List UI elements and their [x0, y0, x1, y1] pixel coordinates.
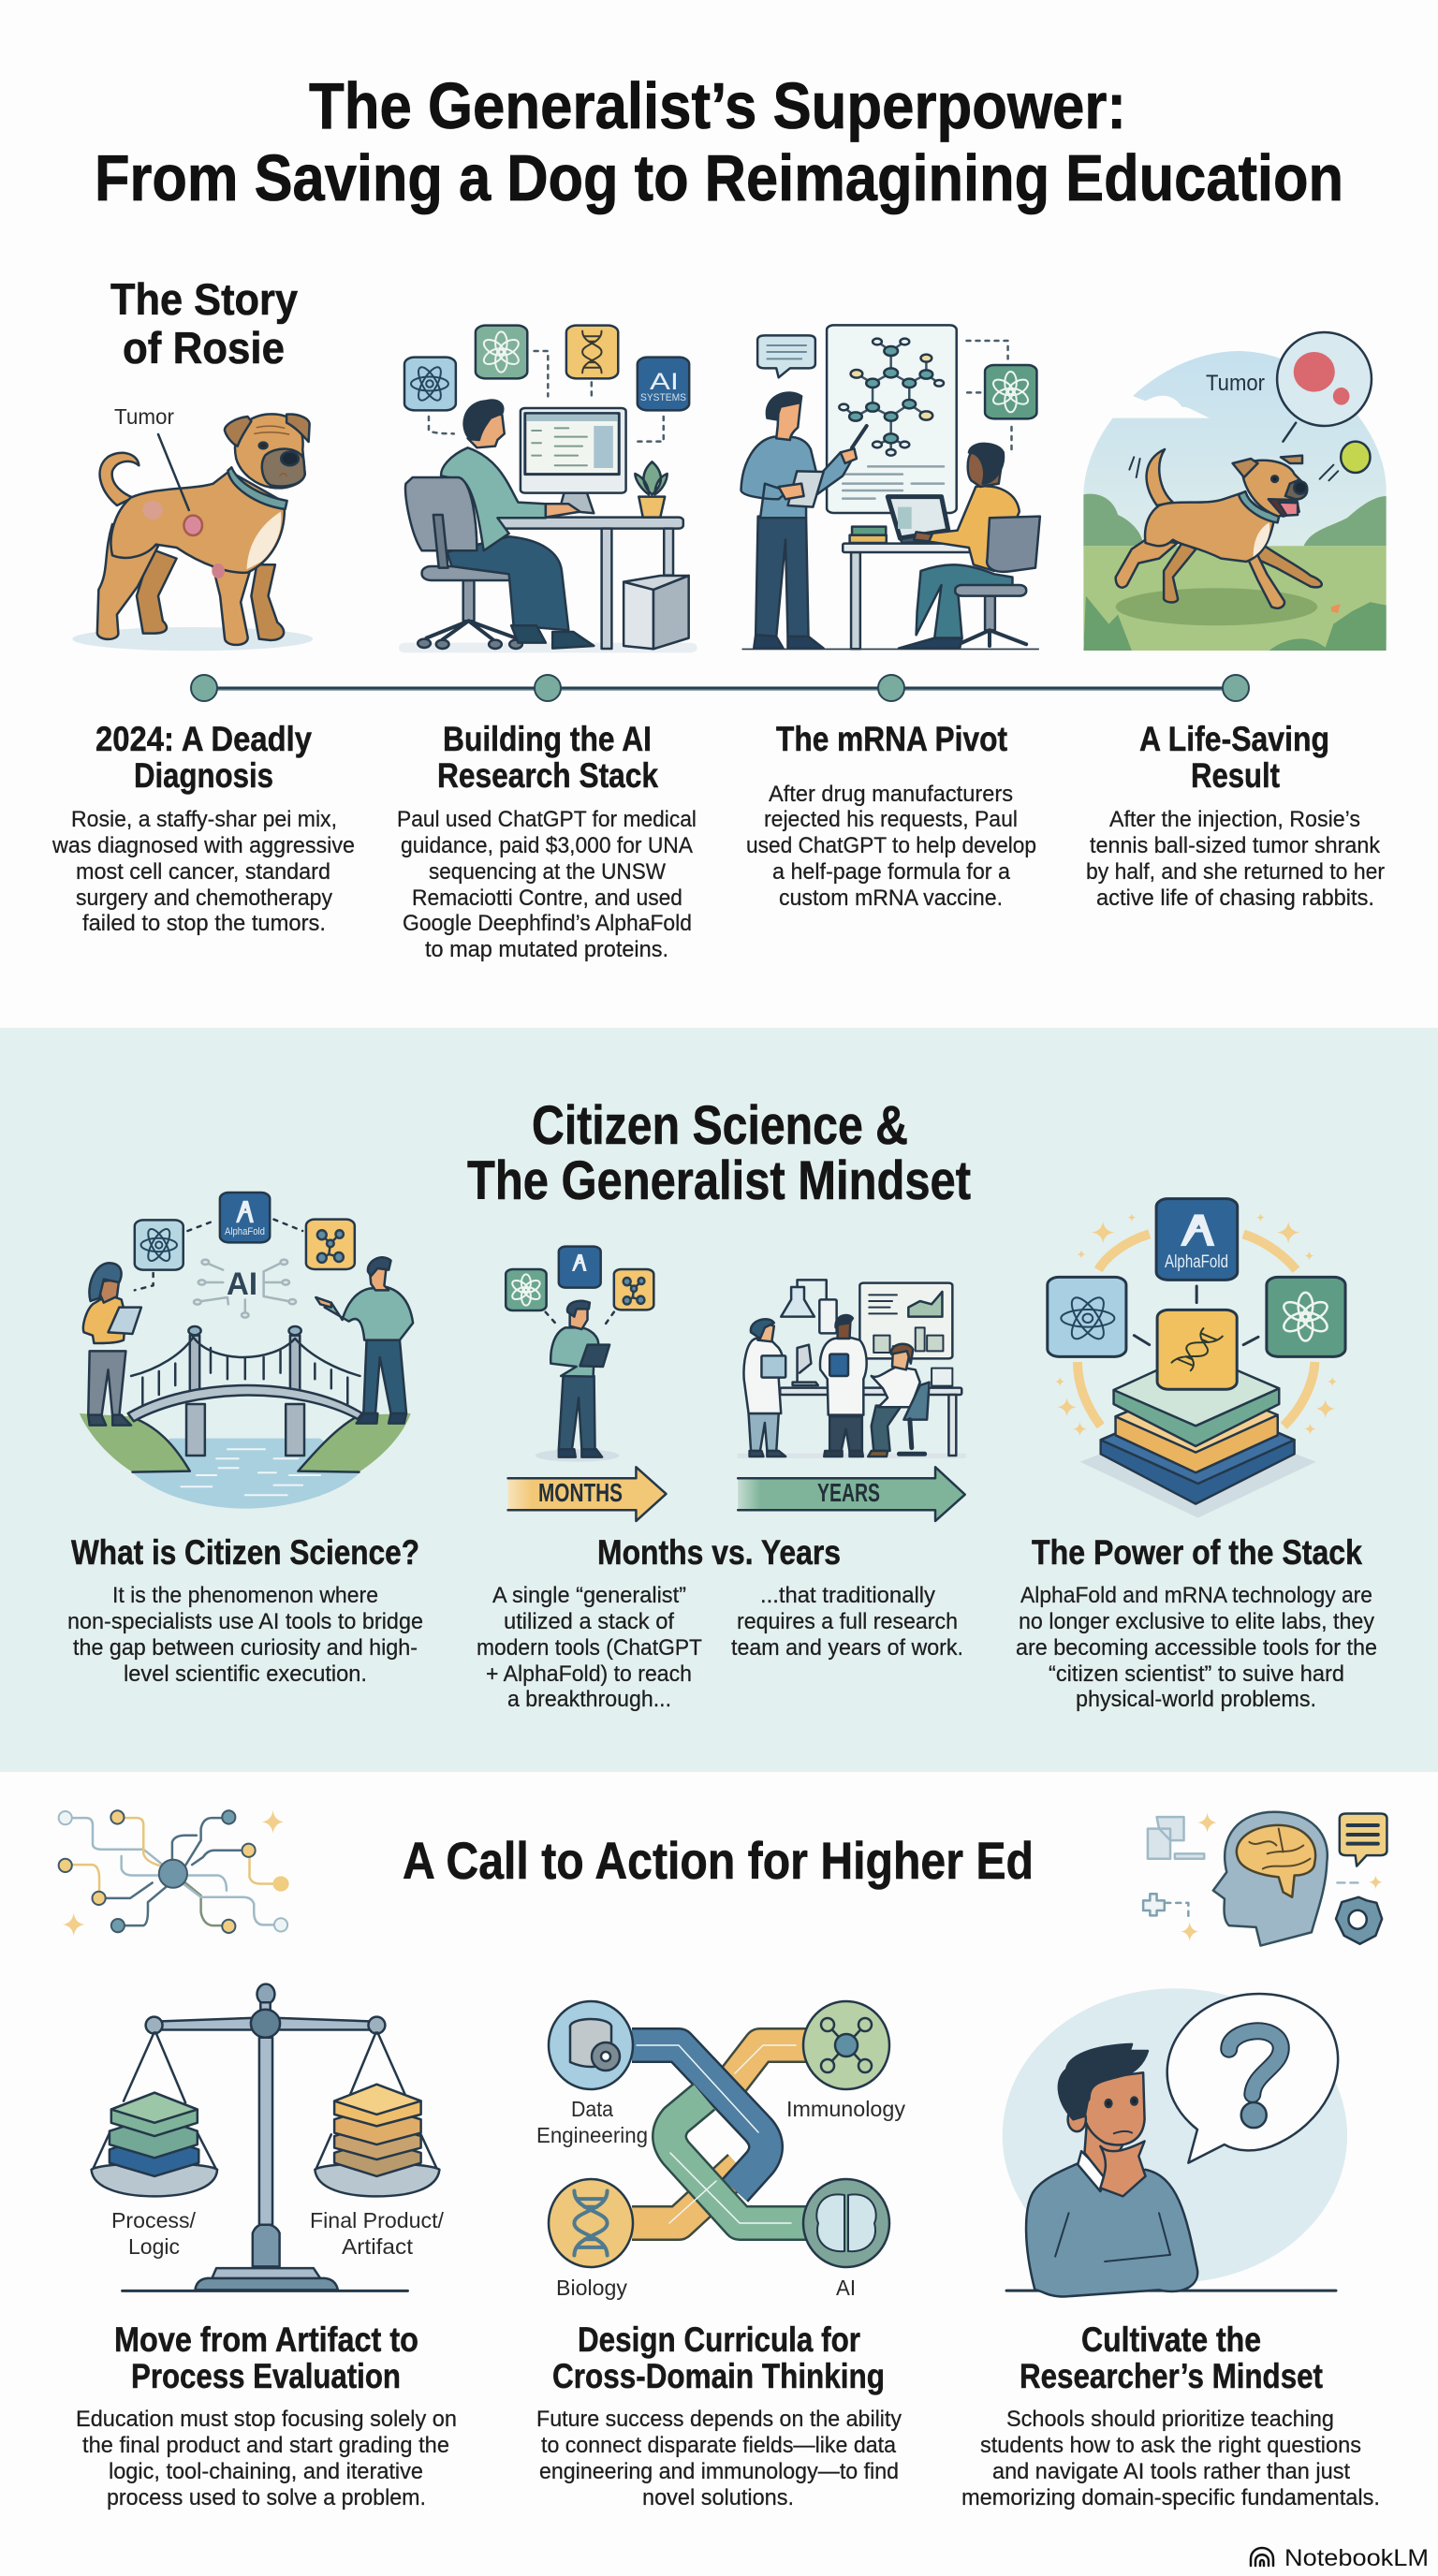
text: Months vs. Years: A single “generalist” — [492, 1583, 686, 1608]
text: Design Curricula for Cross-Domain Thinking: novel solutions. — [642, 2485, 794, 2510]
badge text: AI systems: AI — [650, 369, 679, 395]
text: Design Curricula for Cross-Domain Thinking — [536, 2320, 902, 2510]
text: Building the AI Research Stack: to map mutated proteins. — [425, 937, 668, 962]
icon: circuit network — [59, 1810, 288, 1937]
text: Design Curricula for Cross-Domain Thinking: to connect disparate fields—like data — [541, 2433, 897, 2458]
heading: Citizen Science and The Generalist Mindset: Citizen Science & — [532, 1095, 908, 1156]
illustration: the power of the stack — [1048, 1199, 1345, 1518]
panel: citizen science background — [0, 1028, 1438, 1772]
text: Months vs. Years: modern tools (ChatGPT — [477, 1635, 702, 1661]
text: Move from Artifact to Process Evaluation — [76, 2320, 457, 2510]
text: The mRNA Pivot: After drug manufacturers — [769, 782, 1013, 807]
text: Move from Artifact to Process Evaluation: process used to solve a problem. — [107, 2485, 426, 2510]
text: Move from Artifact to Process Evaluation: the final product and start grading the — [82, 2433, 449, 2458]
text: The Power of the Stack: no longer exclusive to elite labs, they — [1019, 1609, 1374, 1634]
text: Design Curricula for Cross-Domain Thinking: Cross-Domain Thinking — [552, 2357, 885, 2395]
text: Months vs. Years: + AlphaFold) to reach — [486, 1661, 692, 1687]
text: What is Citizen Science: What is Citizen Science? — [71, 1533, 419, 1572]
text: The mRNA Pivot: used ChatGPT to help develop — [746, 833, 1036, 858]
labels: domains: Immunology — [786, 2097, 906, 2121]
diagram: interwoven cross-domain paths — [632, 2045, 810, 2223]
illustration: healthy dog running in park — [1078, 332, 1387, 651]
text: 2024 A Deadly Diagnosis: most cell cancer, standard — [76, 859, 330, 885]
heading: The Story of Rosie: of Rosie — [123, 323, 285, 373]
text: Months vs. Years: requires a full research — [737, 1609, 958, 1634]
badge text: AI systems: SYSTEMS — [640, 392, 686, 403]
text: The mRNA Pivot: rejected his requests, Paul — [764, 807, 1018, 832]
text: The Power of the Stack — [1016, 1533, 1377, 1712]
label: AI and AlphaFold badge text: AlphaFold — [225, 1226, 265, 1237]
text: Move from Artifact to Process Evaluation: Process Evaluation — [131, 2357, 401, 2395]
text: Months vs. Years: a breakthrough... — [507, 1687, 671, 1712]
text: Design Curricula for Cross-Domain Thinking: engineering and immunology—to find — [539, 2459, 899, 2484]
text: Design Curricula for Cross-Domain Thinking: Future success depends on the ability — [536, 2407, 902, 2432]
text: 2024 A Deadly Diagnosis: was diagnosed with aggressive — [51, 833, 355, 858]
icon: data engineering node — [549, 2001, 633, 2089]
text: Move from Artifact to Process Evaluation: Move from Artifact to — [114, 2320, 418, 2359]
text: The mRNA Pivot: a helf-page formula for a — [772, 859, 1011, 885]
label: AI and AlphaFold badge text — [225, 1226, 265, 1302]
icon: biology node — [549, 2179, 633, 2267]
icon: head with brain and tools — [1143, 1812, 1387, 1946]
arrow: YEARS — [738, 1467, 965, 1521]
text: The Power of the Stack: AlphaFold and mRNA technology are — [1020, 1583, 1372, 1608]
text: The Power of the Stack: “citizen scientist” to suive hard — [1049, 1661, 1344, 1687]
text: The Power of the Stack: physical-world problems. — [1076, 1687, 1316, 1712]
arrow: YEARS: YEARS — [817, 1478, 880, 1507]
labels: domains: AI — [836, 2276, 856, 2300]
labels: domains: Biology — [556, 2276, 628, 2300]
illustration: bridge between curiosity and science — [80, 1193, 413, 1509]
text: The mRNA Pivot: The mRNA Pivot — [776, 720, 1007, 758]
illustration: sick dog with tumor — [72, 414, 313, 651]
text: What is Citizen Science — [67, 1533, 423, 1687]
text: Cultivate the Researcher's Mindset: Cultivate the — [1081, 2320, 1261, 2359]
text: Cultivate the Researcher's Mindset: and navigate AI tools rather than just — [992, 2459, 1350, 2484]
label: AI and AlphaFold badge text: AI — [227, 1266, 257, 1302]
labels: Process/Logic and Final Product/Artifact — [111, 2208, 445, 2259]
text: Building the AI Research Stack: guidance, paid $3,000 for UNA — [401, 833, 693, 858]
text: What is Citizen Science: the gap between curiosity and high- — [73, 1635, 418, 1661]
label: Tumor: Tumor — [1206, 371, 1265, 396]
title: The Generalist’s Superpower: — [309, 69, 1126, 142]
heading: The Story of Rosie: The Story — [110, 274, 298, 324]
text: A Life-Saving Result: After the injection, Rosie’s — [1109, 807, 1360, 832]
text: What is Citizen Science: non-specialists use AI tools to bridge — [67, 1609, 423, 1634]
text: 2024 A Deadly Diagnosis: Rosie, a staffy-shar pei mix, — [71, 807, 337, 832]
text: Months vs. Years — [477, 1533, 963, 1712]
heading: Citizen Science and The Generalist Mindset — [467, 1095, 971, 1211]
text: A Life-Saving Result: by half, and she returned to her — [1086, 859, 1385, 885]
labels: Process/Logic and Final Product/Artifact: Process/ — [111, 2208, 197, 2232]
text: Months vs. Years: ...that traditionally — [760, 1583, 935, 1608]
text: A Life-Saving Result: Result — [1191, 756, 1280, 795]
text: Cultivate the Researcher's Mindset: Schools should prioritize teaching — [1006, 2407, 1334, 2432]
labels: domains: Engineering — [536, 2123, 648, 2147]
text: Building the AI Research Stack — [397, 720, 697, 962]
text: Move from Artifact to Process Evaluation: logic, tool-chaining, and iterative — [109, 2459, 423, 2484]
illustration: thinking researcher with question — [1003, 1988, 1347, 2297]
icon: AI brain node — [803, 2179, 889, 2267]
logo: NotebookLM: NotebookLM — [1284, 2545, 1429, 2571]
text: A Life-Saving Result — [1086, 720, 1385, 911]
text: Building the AI Research Stack: Paul used ChatGPT for medical — [397, 807, 697, 832]
labels: domains — [536, 2097, 906, 2300]
text: The Power of the Stack: The Power of the Stack — [1032, 1533, 1362, 1572]
text: Cultivate the Researcher's Mindset: Researcher’s Mindset — [1020, 2357, 1323, 2395]
text: Building the AI Research Stack: sequencing at the UNSW — [429, 859, 666, 885]
text: Cultivate the Researcher's Mindset: memorizing domain-specific fundamentals. — [961, 2485, 1380, 2510]
text: Months vs. Years: Months vs. Years — [597, 1533, 841, 1572]
illustration: researcher at computer with AI tools — [399, 326, 697, 652]
text: What is Citizen Science: level scientific execution. — [124, 1661, 367, 1687]
text: Building the AI Research Stack: Google Deephfind’s AlphaFold — [403, 911, 692, 936]
labels: Process/Logic and Final Product/Artifact: Logic — [128, 2234, 180, 2259]
icon: immunology node — [803, 2001, 889, 2089]
text: 2024 A Deadly Diagnosis: 2024: A Deadly — [95, 720, 312, 758]
arrow: MONTHS: MONTHS — [538, 1478, 623, 1507]
label: Tumor: Tumor — [114, 404, 174, 429]
text: Move from Artifact to Process Evaluation: Education must stop focusing solely on — [76, 2407, 457, 2432]
text: Building the AI Research Stack: Building the AI — [443, 720, 652, 758]
text: What is Citizen Science: It is the phenomenon where — [112, 1583, 378, 1608]
heading: The Story of Rosie — [110, 274, 298, 373]
text: Building the AI Research Stack: Remaciotti Contre, and used — [412, 886, 682, 911]
timeline — [191, 675, 1249, 701]
text: Cultivate the Researcher's Mindset — [961, 2320, 1380, 2510]
illustration: single generalist with tools — [506, 1247, 653, 1462]
text: 2024 A Deadly Diagnosis: Diagnosis — [134, 756, 273, 795]
text: A Life-Saving Result: tennis ball-sized tumor shrank — [1090, 833, 1381, 858]
text: The mRNA Pivot — [746, 720, 1036, 911]
heading: Citizen Science and The Generalist Mindset: The Generalist Mindset — [467, 1150, 971, 1211]
text: The Power of the Stack: are becoming accessible tools for the — [1016, 1635, 1377, 1661]
badge text: AI systems — [640, 369, 686, 403]
title — [95, 69, 1343, 214]
text: Months vs. Years: utilized a stack of — [504, 1609, 674, 1634]
text: 2024 A Deadly Diagnosis: surgery and chemotherapy — [76, 886, 332, 911]
arrow: MONTHS — [508, 1467, 667, 1521]
text: 2024 A Deadly Diagnosis — [51, 720, 355, 936]
text: Building the AI Research Stack: Research Stack — [437, 756, 658, 795]
labels: Process/Logic and Final Product/Artifact: Final Product/ — [310, 2208, 445, 2232]
label: AlphaFold: AlphaFold — [1165, 1252, 1228, 1272]
labels: Process/Logic and Final Product/Artifact: Artifact — [342, 2234, 414, 2259]
heading: A Call to Action for Higher Ed: A Call to Action for Higher Ed — [403, 1831, 1034, 1890]
text: 2024 A Deadly Diagnosis: failed to stop the tumors. — [82, 911, 326, 936]
text: A Life-Saving Result: active life of chasing rabbits. — [1096, 886, 1374, 911]
text: Design Curricula for Cross-Domain Thinking: Design Curricula for — [578, 2320, 860, 2359]
illustration: balance scale — [92, 1984, 439, 2291]
text: Cultivate the Researcher's Mindset: students how to ask the right questions — [980, 2433, 1361, 2458]
illustration: mRNA formula discussion — [741, 325, 1040, 650]
text: The mRNA Pivot: custom mRNA vaccine. — [779, 886, 1003, 911]
text: Months vs. Years: team and years of work. — [731, 1635, 963, 1661]
illustration: research team in lab — [737, 1280, 966, 1458]
text: A Life-Saving Result: A Life-Saving — [1139, 720, 1329, 758]
labels: domains: Data — [571, 2097, 613, 2121]
